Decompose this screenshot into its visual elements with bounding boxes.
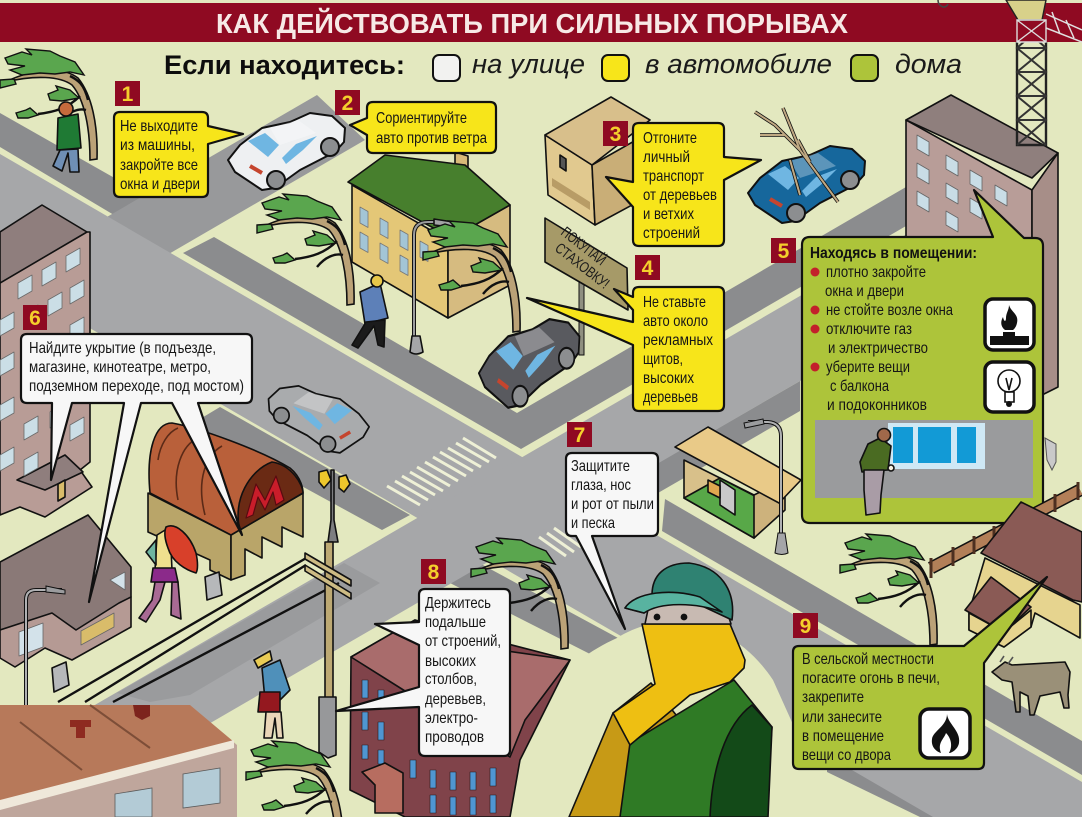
panel 9: countryside: или занесите	[802, 709, 882, 726]
advice list: отключите газ	[826, 321, 912, 338]
tree top left	[0, 49, 97, 160]
metro entrance	[148, 423, 303, 580]
advice list: с балкона	[830, 378, 889, 395]
callout 4: рекламных	[643, 332, 713, 349]
callout 1: закройте все	[120, 157, 198, 174]
callout 1: из машины,	[120, 137, 195, 154]
callout 3: строений	[643, 225, 700, 242]
tan shed	[545, 97, 650, 225]
callout 3: Отгоните	[643, 130, 697, 147]
callout 4: щитов,	[643, 351, 683, 368]
blue car under fallen tree	[748, 108, 865, 223]
callout 6: магазине, кинотеатре, метро,	[29, 359, 211, 376]
brick building	[350, 620, 570, 817]
panel 9: countryside: погасите огонь в печи,	[802, 670, 940, 687]
callout 7	[566, 422, 658, 629]
pale circle around man	[510, 622, 830, 817]
callout 3: и ветхих	[643, 206, 694, 223]
callout 1: Не выходите	[120, 118, 198, 135]
callout 6: 6	[29, 307, 41, 330]
callout 8: 8	[428, 561, 440, 584]
crane tower	[1017, 22, 1046, 145]
title: КАК ДЕЙСТВОВАТЬ ПРИ СИЛЬНЫХ ПОРЫВАХ	[216, 7, 848, 39]
callout 3: транспорт	[643, 168, 705, 185]
callout 2: авто против ветра	[376, 130, 487, 147]
street lamp right	[744, 419, 788, 554]
callout 7: и рот от пыли	[571, 496, 654, 513]
callout 8	[336, 559, 510, 756]
street lamp left	[26, 586, 65, 705]
crosswalks	[387, 438, 581, 556]
ornate lamp post	[319, 470, 350, 542]
advice list	[810, 264, 953, 414]
callout 8: от строений,	[425, 633, 501, 650]
callout 2	[335, 90, 496, 153]
coat yellow part	[569, 683, 680, 817]
panel heading: Находясь в помещении:	[810, 245, 977, 262]
bench	[1045, 438, 1056, 470]
panel 5: indoors: 5	[778, 240, 790, 263]
dark SUV	[479, 319, 579, 408]
silver car	[269, 386, 369, 453]
advice list: окна и двери	[825, 283, 904, 300]
tree by fence	[840, 534, 937, 645]
gray roof house	[0, 515, 131, 667]
advice list: плотно закройте	[826, 264, 926, 281]
callout 7: глаза, нос	[571, 477, 631, 494]
advice list: и электричество	[828, 340, 928, 357]
billboard: СТАХОВКУ!	[552, 240, 612, 293]
panel 5: indoors	[771, 190, 1043, 523]
legend: home: дома	[895, 49, 962, 79]
callout 7: и песка	[571, 515, 615, 532]
callout 1: окна и двери	[120, 176, 200, 193]
tree by road	[257, 194, 354, 305]
icon: gas	[985, 299, 1034, 350]
callout 8: электро-	[425, 710, 478, 727]
trash bin left	[52, 662, 69, 692]
callout 7: 7	[574, 424, 585, 447]
crane top	[938, 0, 1082, 42]
callout 8: проводов	[425, 729, 484, 746]
person in blue coat	[352, 275, 388, 348]
person at window	[860, 428, 894, 515]
panel 9: countryside: вещи со двора	[802, 747, 891, 764]
callout 4	[527, 255, 724, 411]
legend: home	[851, 49, 962, 81]
callout 6: подземном переходе, под мостом)	[29, 378, 244, 395]
panel 9: countryside: закрепите	[802, 689, 864, 706]
legend: street: на улице	[472, 49, 585, 79]
callout 2: Сориентируйте	[376, 110, 467, 127]
billboard: ПОКУПАЙ	[558, 223, 610, 269]
street lamp centre	[410, 219, 453, 354]
scarf	[613, 624, 745, 745]
callout 8: столбов,	[425, 671, 477, 688]
face	[645, 600, 731, 624]
cow	[992, 656, 1070, 715]
coat green	[620, 680, 772, 817]
bottom left building	[0, 705, 237, 817]
callout 7: Защитите	[571, 458, 630, 475]
tree bottom	[246, 741, 343, 817]
woman with red bag	[254, 651, 290, 738]
trash bin near metro	[205, 572, 222, 600]
window illustration	[815, 420, 1033, 498]
bus stop	[675, 427, 801, 538]
callout 4: высоких	[643, 370, 694, 387]
tree at roadside	[423, 221, 520, 332]
advice list: и подоконников	[827, 397, 927, 414]
callout 8: деревьев,	[425, 691, 486, 708]
utility pole	[305, 542, 351, 758]
rural house	[965, 502, 1082, 647]
tree near crossing	[471, 538, 568, 649]
callout 4: деревьев	[643, 389, 698, 406]
apartment block 6	[0, 205, 92, 517]
advice list: не стойте возле окна	[826, 302, 953, 319]
callout 3: 3	[610, 123, 621, 146]
power lines	[58, 557, 339, 702]
callout 8: Держитесь	[425, 595, 491, 612]
callout 1	[114, 81, 243, 197]
callout 2: 2	[342, 92, 353, 115]
panel 9: countryside	[793, 577, 1047, 769]
billboard	[545, 218, 628, 355]
legend: car: в автомобиле	[645, 49, 832, 79]
callout 8: высоких	[425, 653, 476, 670]
cap	[625, 563, 733, 620]
apartment block 5	[906, 95, 1058, 420]
callout 8: подальше	[425, 614, 486, 631]
callout 3: личный	[643, 149, 690, 166]
icon: flame	[920, 709, 970, 758]
legend: street	[433, 49, 585, 81]
callout 3: от деревьев	[643, 187, 717, 204]
advice list: уберите вещи	[826, 359, 910, 376]
woman with red umbrella	[139, 526, 198, 622]
callout 3	[603, 121, 761, 246]
yellow house with green roof	[348, 152, 510, 318]
man with scarf	[569, 563, 772, 817]
panel 9: countryside: В сельской местности	[802, 651, 934, 668]
person walking top left	[53, 102, 81, 172]
legend	[164, 49, 962, 81]
callout 6	[21, 305, 252, 602]
panel 9: countryside: 9	[800, 615, 811, 638]
callout 4: Не ставьте	[643, 294, 706, 311]
fence	[931, 482, 1080, 578]
callout 6: Найдите укрытие (в подъезде,	[29, 340, 216, 357]
callout 4: авто около	[643, 313, 708, 330]
sleeve	[710, 705, 772, 817]
icon: light bulb	[985, 362, 1034, 412]
legend heading: Если находитесь:	[164, 50, 405, 80]
panel 9: countryside: в помещение	[802, 728, 884, 745]
callout 1: 1	[122, 83, 134, 106]
white car	[228, 113, 345, 190]
callout 4: 4	[642, 257, 654, 280]
title band	[0, 3, 1082, 42]
